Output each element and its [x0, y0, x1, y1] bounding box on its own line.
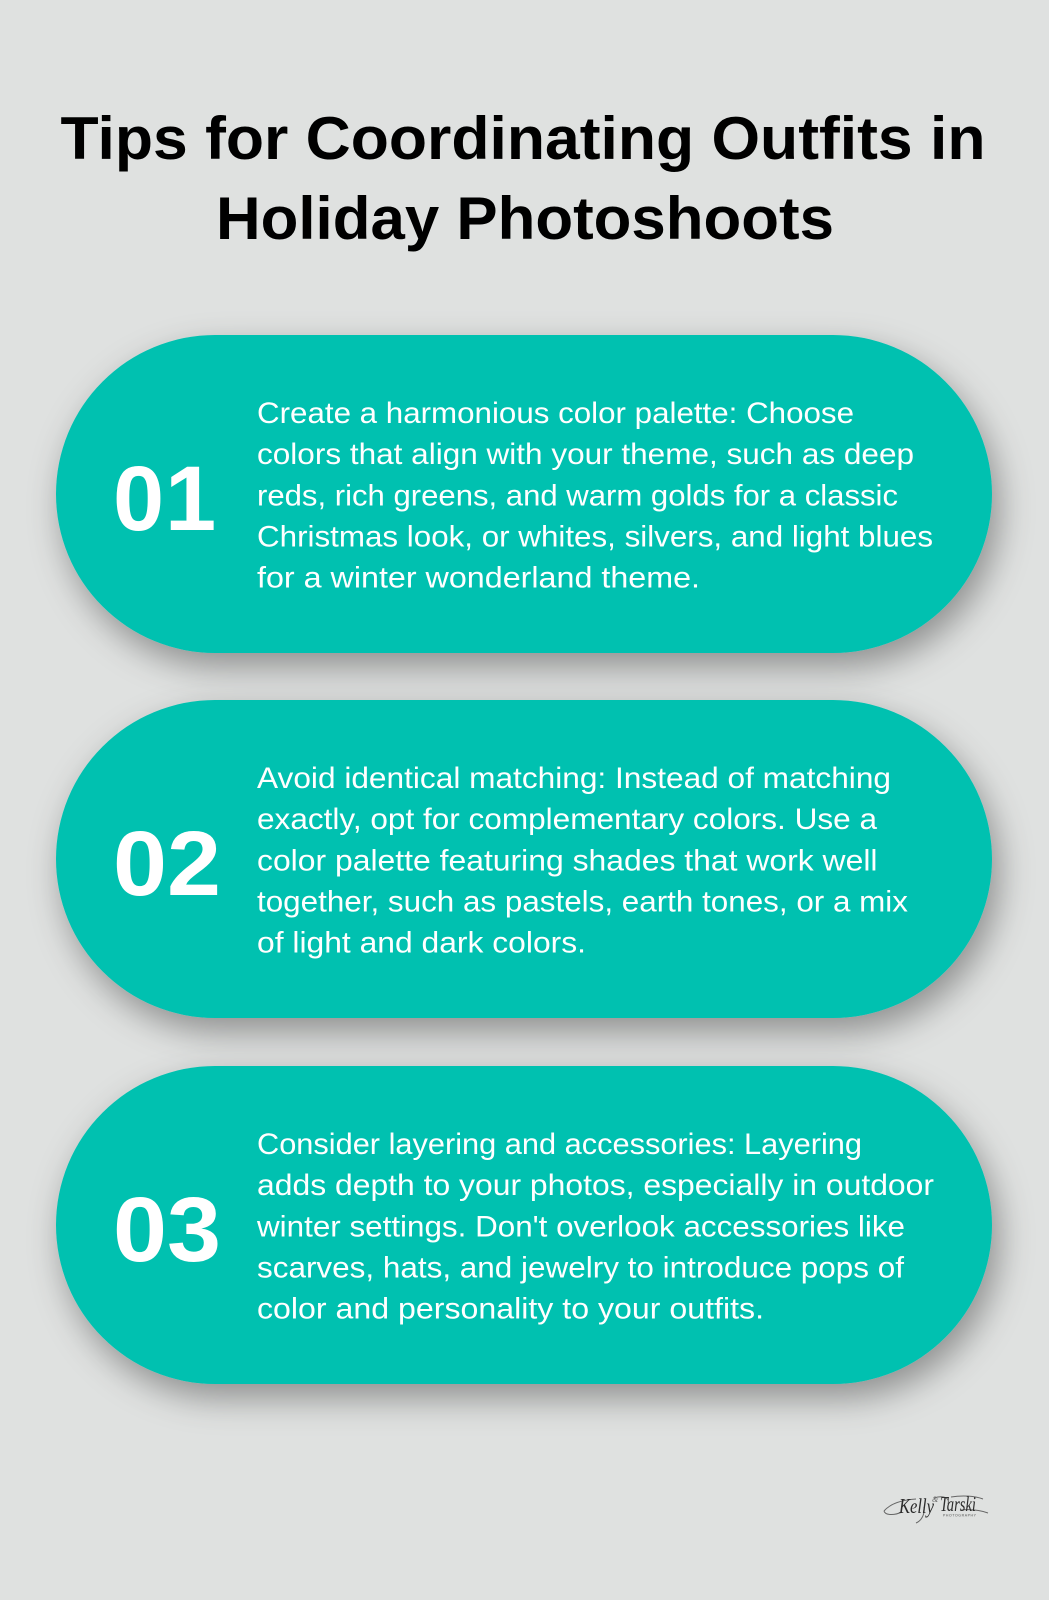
title: Tips for Coordinating Outfits in	[60, 105, 985, 172]
text: tip 02: of light and dark colors.	[257, 926, 586, 960]
number 03: 03	[113, 1179, 221, 1281]
text: tip 02: exactly, opt for complementary colors. Use a	[257, 803, 877, 836]
text: tip 02: Avoid identical matching: Instead of matching	[257, 762, 891, 795]
text: tip 02	[257, 762, 908, 960]
text: tip 01: Create a harmonious color palette: Choose	[257, 397, 854, 430]
text: tip 01: for a winter wonderland theme.	[257, 562, 700, 594]
text: tip 02: together, such as pastels, earth tones, or a mix	[257, 886, 908, 918]
text: tip 03: scarves, hats, and jewelry to introduce pops of	[257, 1252, 905, 1284]
logo: signature: Kelly	[898, 1494, 935, 1518]
text: tip 03: color and personality to your outfits.	[257, 1292, 764, 1326]
number 01: 01	[113, 448, 216, 550]
text: tip 03: Consider layering and accessories: Layering	[257, 1128, 862, 1161]
logo: signature: PHOTOGRAPHY	[943, 1514, 977, 1518]
logo: signature	[884, 1492, 988, 1523]
text: tip 01: Christmas look, or whites, silvers, and light blues	[257, 520, 933, 554]
text: tip 01: colors that align with your theme, such as deep	[257, 438, 914, 471]
text: tip 03: winter settings. Don't overlook accessories like	[256, 1210, 905, 1244]
text: tip 03: adds depth to your photos, especially in outdoor	[257, 1169, 934, 1202]
number 02: 02	[113, 813, 221, 915]
title: Holiday Photoshoots	[216, 185, 834, 252]
logo: signature: &	[932, 1495, 939, 1504]
panel: tip 01	[56, 335, 992, 653]
text: tip 03	[256, 1128, 934, 1326]
panel: tip 02	[56, 700, 992, 1018]
logo: signature: Tarski	[940, 1492, 976, 1516]
text: tip 02: color palette featuring shades that work well	[257, 844, 878, 878]
title	[60, 105, 985, 252]
text: tip 01: reds, rich greens, and warm golds for a classic	[257, 480, 898, 512]
panel: tip 03	[56, 1066, 992, 1384]
text: tip 01	[257, 397, 933, 594]
